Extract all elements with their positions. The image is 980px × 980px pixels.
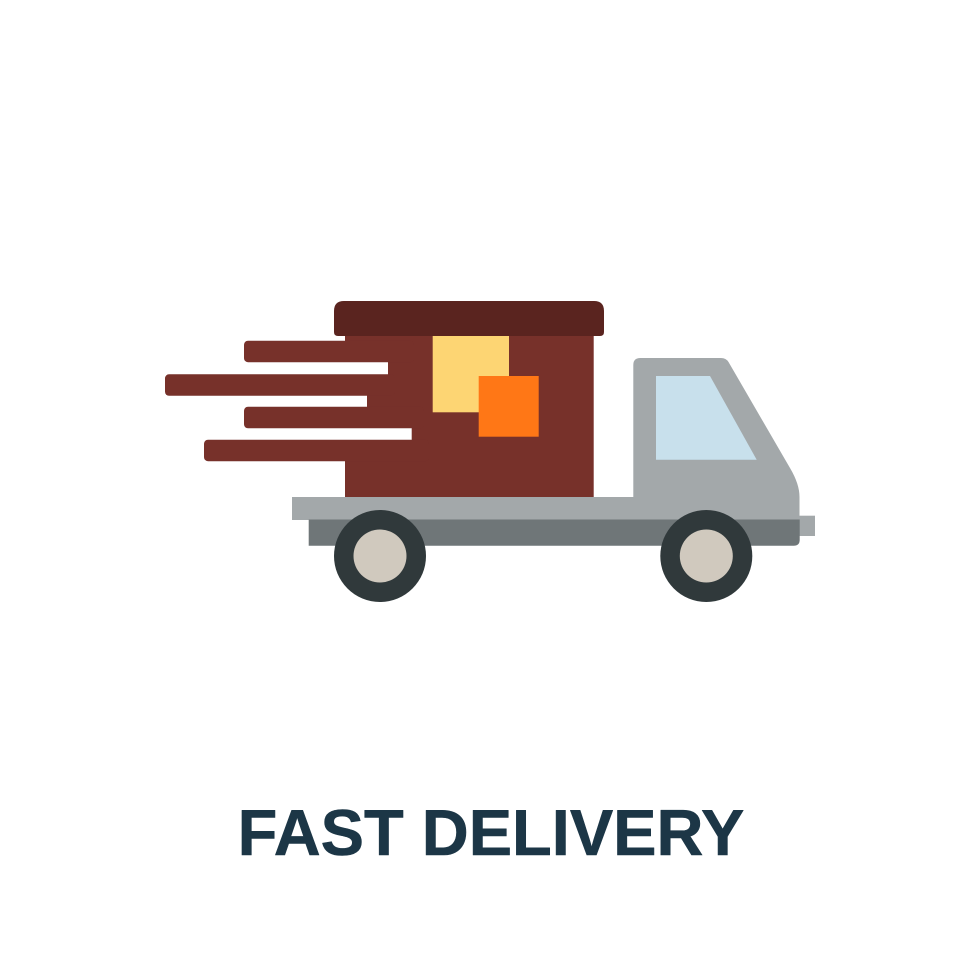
cab window (656, 376, 757, 460)
cargo box roof (334, 301, 604, 336)
rear wheel (334, 510, 426, 602)
orange parcel (479, 376, 539, 437)
icon: delivery truck (165, 301, 815, 602)
speed lines (165, 341, 429, 461)
chassis (309, 520, 800, 546)
cargo box (344, 330, 594, 497)
gaps between speed lines (344, 360, 412, 442)
truck cab and deck (292, 358, 800, 520)
front wheel (660, 510, 752, 602)
yellow parcel (433, 336, 509, 412)
rear bumper (795, 516, 815, 536)
title: FAST DELIVERY (238, 796, 744, 869)
